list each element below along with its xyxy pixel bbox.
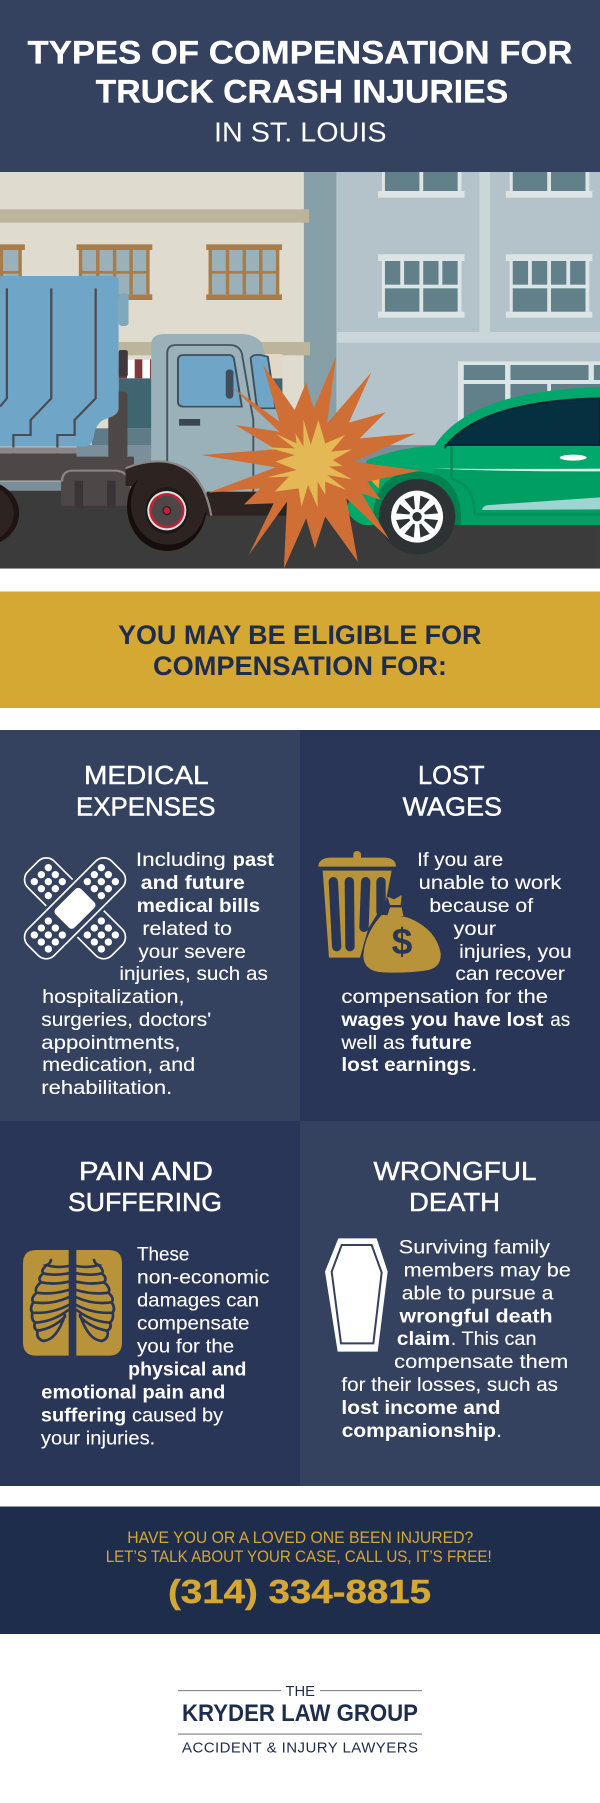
icon: trash can and money bag: $: [392, 920, 413, 962]
panel: lost wages: [300, 730, 600, 1121]
text: medical expenses description: injuries, such as: [119, 963, 268, 985]
text: medical expenses description: hospitalization,: [42, 986, 184, 1008]
text: medical expenses description: past: [233, 849, 275, 871]
explosion: [201, 357, 420, 569]
header panel: [0, 0, 600, 172]
text: lost wages description: injuries, you: [459, 941, 572, 963]
title: TRUCK CRASH INJURIES: [96, 74, 508, 110]
logo: The Kryder Law Group: THE: [286, 1683, 315, 1700]
text: lost wages description: can recover: [455, 963, 565, 985]
text: pain and suffering description: you for the: [137, 1336, 234, 1358]
heading: lost wages: WAGES: [403, 794, 502, 822]
banner heading: YOU MAY BE ELIGIBLE FOR: [118, 620, 482, 650]
logo: The Kryder Law Group: [178, 1683, 422, 1757]
call to action text: LET’S TALK ABOUT YOUR CASE, CALL US, IT’S FREE!: [106, 1548, 492, 1566]
text: lost wages description: future: [411, 1032, 472, 1054]
heading: lost wages: LOST: [418, 762, 484, 790]
heading: medical expenses: EXPENSES: [76, 794, 216, 822]
heading: wrongful death: DEATH: [409, 1189, 500, 1217]
text: wrongful death description: claim: [397, 1328, 450, 1350]
panel: pain and suffering: [0, 1121, 300, 1486]
text: medical expenses description: [41, 849, 275, 1099]
call to action banner: [0, 1506, 600, 1634]
text: wrongful death description: able to pursue a: [402, 1282, 554, 1304]
text: pain and suffering description: compensate: [137, 1313, 250, 1335]
text: pain and suffering description: These: [137, 1244, 189, 1266]
text: wrongful death description: .: [496, 1420, 502, 1442]
heading: wrongful death: [374, 1158, 536, 1217]
text: medical expenses description: appointments,: [41, 1032, 181, 1054]
text: wrongful death description: for their losses, such as: [341, 1374, 558, 1396]
panel: wrongful death: [300, 1121, 600, 1486]
text: medical expenses description: Including: [136, 849, 226, 871]
icon: coffin: [325, 1238, 388, 1352]
illustration: truck and car collision street scene: [0, 172, 600, 569]
call to action text: [106, 1529, 492, 1566]
text: wrongful death description: lost income and: [341, 1397, 501, 1419]
text: lost wages description: your: [454, 918, 497, 940]
text: lost wages description: as: [550, 1009, 570, 1031]
text: medical expenses description: medical bills: [137, 895, 260, 917]
call to action text: HAVE YOU OR A LOVED ONE BEEN INJURED?: [127, 1529, 473, 1547]
text: medical expenses description: medication, and: [42, 1054, 195, 1076]
title: TYPES OF COMPENSATION FOR: [28, 34, 572, 70]
text: pain and suffering description: caused by: [132, 1404, 223, 1426]
text: lost wages description: well as: [340, 1032, 405, 1054]
truck: [0, 276, 287, 551]
text: lost wages description: because of: [429, 895, 534, 917]
text: lost wages description: wages you have lost: [340, 1009, 544, 1031]
subtitle: IN ST. LOUIS: [214, 117, 386, 148]
heading: medical expenses: [76, 762, 216, 822]
heading: pain and suffering: PAIN AND: [79, 1158, 213, 1186]
text: lost wages description: unable to work: [419, 872, 562, 894]
panel: medical expenses: [0, 730, 300, 1121]
text: medical expenses description: rehabilitation.: [41, 1077, 172, 1099]
text: wrongful death description: Surviving family: [399, 1236, 550, 1258]
phone number: (314) 334-8815: [168, 1573, 431, 1610]
icon: rib cage: [23, 1250, 122, 1356]
text: wrongful death description: . This can: [451, 1328, 536, 1350]
buildings: [0, 172, 600, 569]
title: [28, 34, 572, 110]
heading: wrongful death: WRONGFUL: [374, 1158, 536, 1186]
text: lost wages description: lost earnings: [341, 1054, 471, 1076]
text: wrongful death description: wrongful death: [398, 1305, 553, 1327]
text: pain and suffering description: your injuries.: [41, 1428, 155, 1450]
car: [346, 387, 600, 554]
banner heading: [118, 620, 482, 681]
text: medical expenses description: your severe: [138, 941, 246, 963]
storefront and road: [0, 354, 600, 569]
logo: The Kryder Law Group: ACCIDENT & INJURY LAWYERS: [182, 1740, 418, 1757]
heading: lost wages: [403, 762, 502, 822]
text: medical expenses description: surgeries, doctors': [41, 1009, 211, 1031]
text: pain and suffering description: physical and: [128, 1358, 246, 1380]
text: pain and suffering description: suffering: [41, 1404, 126, 1426]
text: lost wages description: If you are: [417, 849, 503, 871]
text: lost wages description: compensation for the: [341, 986, 548, 1008]
text: pain and suffering description: [41, 1244, 270, 1450]
text: pain and suffering description: non-economic: [137, 1267, 270, 1289]
text: pain and suffering description: emotional pain and: [41, 1382, 225, 1404]
text: pain and suffering description: damages can: [137, 1290, 259, 1312]
text: wrongful death description: compensate them: [394, 1351, 568, 1373]
text: medical expenses description: related to: [142, 918, 232, 940]
text: medical expenses description: and future: [141, 872, 245, 894]
heading: medical expenses: MEDICAL: [84, 762, 209, 790]
icon: crossed bandages: [16, 849, 134, 968]
heading: pain and suffering: SUFFERING: [68, 1189, 222, 1217]
text: wrongful death description: members may be: [404, 1259, 571, 1281]
text: lost wages description: [340, 849, 572, 1076]
text: lost wages description: .: [472, 1054, 477, 1076]
text: wrongful death description: companionship: [342, 1420, 496, 1442]
text: wrongful death description: [341, 1236, 571, 1442]
logo: The Kryder Law Group: KRYDER LAW GROUP: [182, 1700, 418, 1727]
banner heading: COMPENSATION FOR:: [153, 651, 447, 681]
heading: pain and suffering: [68, 1158, 222, 1217]
eligibility banner: [0, 592, 600, 708]
icon: trash can and money bag: [318, 851, 441, 973]
